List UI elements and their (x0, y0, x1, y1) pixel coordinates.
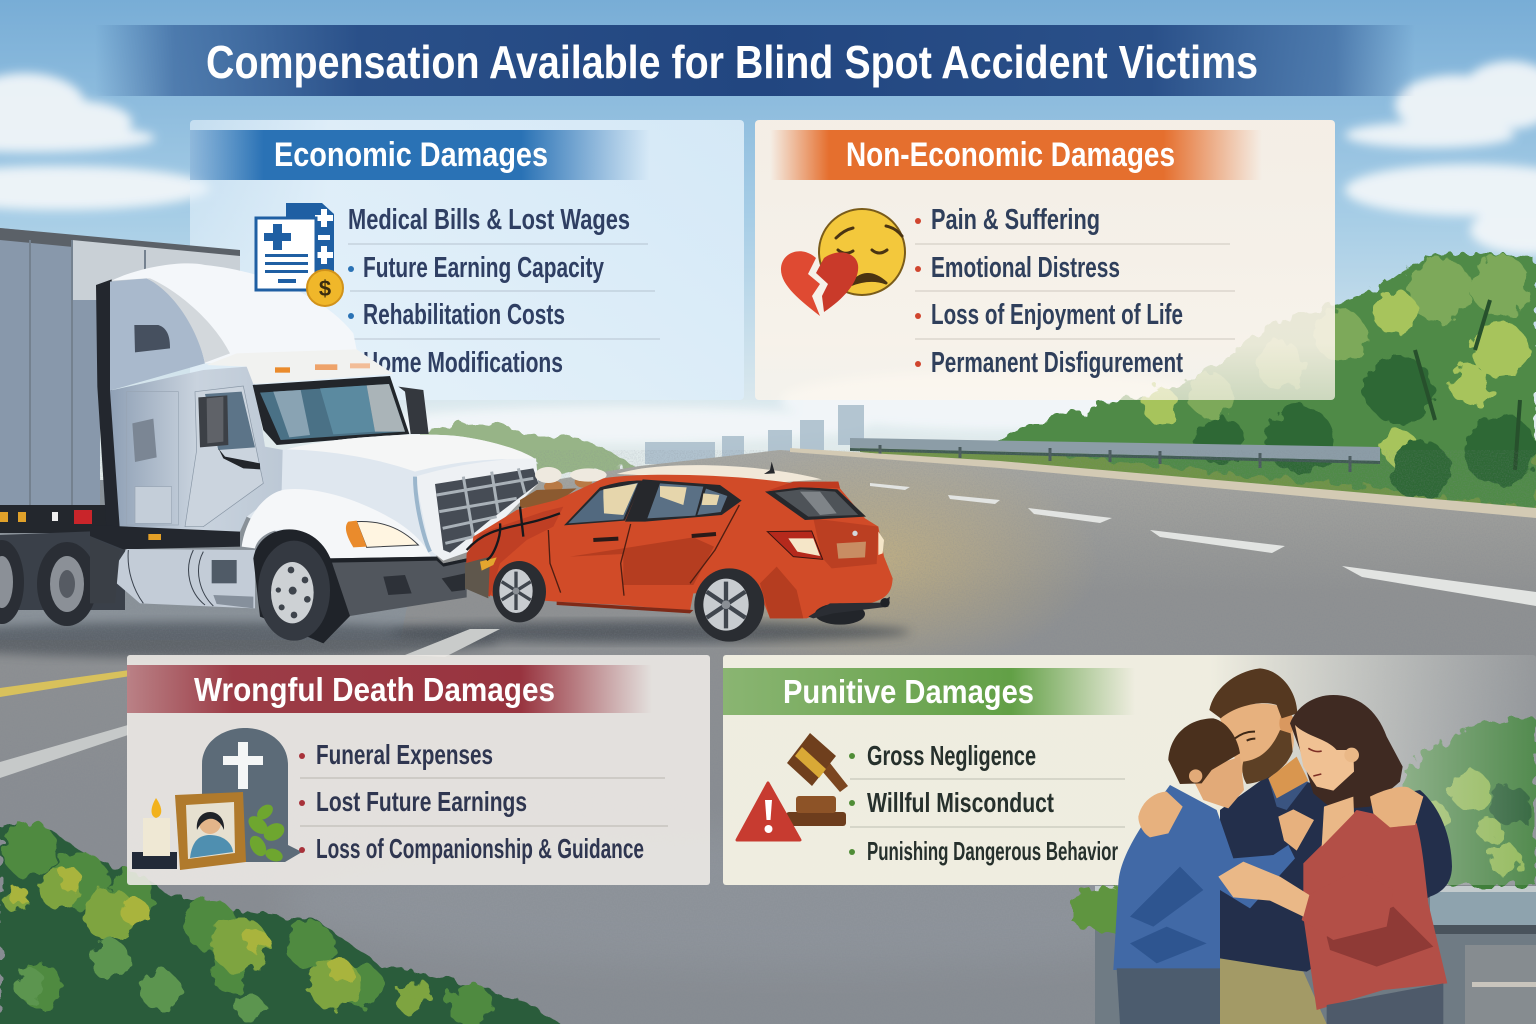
grille (415, 458, 538, 561)
icon: sad face and broken heart (781, 209, 905, 316)
heading: non-economic damages (770, 130, 1262, 180)
hood and front (242, 435, 538, 558)
panel: punitive damages (723, 655, 1536, 885)
illustration: family embracing (1113, 668, 1452, 1024)
background: road surface (0, 445, 1536, 1024)
woman (1218, 695, 1447, 1024)
illustration: red car traced in zoom coordinates (465, 462, 893, 642)
truck trailer (0, 228, 240, 533)
cab upper side (110, 278, 205, 391)
icon: medical bills: $ (319, 276, 331, 301)
heading: punitive damages: Punitive Damages (783, 673, 1034, 710)
bumper (330, 557, 467, 616)
heading: non-economic damages: Non-Economic Damages (846, 136, 1175, 174)
heading: economic damages (190, 130, 650, 180)
list: wrongful death damages: Funeral Expenses (316, 739, 493, 770)
car shading (557, 518, 878, 618)
heading: wrongful death damages: Wrongful Death Damages (194, 671, 555, 708)
cab side details (127, 386, 263, 527)
icon: medical bills (256, 203, 343, 306)
background: shrubs bottom left (0, 822, 570, 1024)
list: punitive damages: Willful Misconduct (867, 787, 1054, 818)
headlight (346, 521, 418, 547)
illustration: semi truck (0, 228, 538, 643)
list: non-economic damages (915, 204, 1235, 379)
car roof (617, 465, 822, 483)
car rear side windows (625, 479, 742, 522)
man (1209, 668, 1452, 1024)
background: distant city skyline (645, 405, 864, 464)
car wheels (493, 561, 764, 642)
visor (207, 349, 393, 384)
background: distant trees (420, 422, 640, 475)
list: wrongful death damages: Lost Future Earnings (316, 786, 527, 817)
front wheel (253, 529, 350, 643)
list: non-economic damages: Loss of Enjoyment of Life (931, 299, 1183, 331)
car bumper exhaust (808, 597, 890, 625)
list: punitive damages: Gross Negligence (867, 740, 1036, 771)
list: non-economic damages: Emotional Distress (931, 252, 1120, 284)
chassis and fuel tank (90, 525, 255, 608)
background: concrete barrier bottom right (1095, 886, 1536, 1024)
car front window (564, 481, 643, 525)
background: trees on the right (1000, 254, 1536, 510)
panel: non-economic damages (755, 120, 1335, 400)
background: clouds (0, 61, 1536, 443)
car rear window and spoiler (765, 482, 866, 520)
list: wrongful death damages: Loss of Companionship & Guidance (316, 833, 644, 864)
title banner: Compensation Available for Blind Spot Accident Victims (206, 36, 1258, 88)
car damaged front (465, 507, 563, 598)
cab window (134, 325, 170, 352)
list: punitive damages (849, 740, 1125, 866)
list: wrongful death damages (299, 739, 668, 864)
icon: gravestone with candle and photo (132, 728, 302, 870)
icon: gavel and warning triangle (737, 733, 848, 840)
heading: economic damages: Economic Damages (274, 136, 548, 174)
cab pillar (96, 279, 121, 532)
antenna (764, 462, 775, 474)
heading: punitive damages (723, 668, 1135, 715)
boy (1113, 718, 1314, 1024)
list: economic damages: Future Earning Capacity (363, 252, 604, 284)
windshield (253, 376, 409, 445)
background: guardrail (850, 438, 1380, 472)
list: economic damages: Home Modifications (363, 347, 563, 379)
heading: wrongful death damages (127, 665, 652, 713)
list: economic damages: Medical Bills & Lost Wages (348, 204, 630, 236)
title banner (95, 25, 1415, 96)
list: punitive damages: Punishing Dangerous Behavior (867, 836, 1118, 866)
background: shrub bottom right (1075, 715, 1536, 935)
truck rear wheels (0, 530, 125, 626)
truck cab traced in zoom coordinates (90, 263, 538, 643)
car body (467, 475, 893, 618)
panel: economic damages (190, 120, 744, 400)
car taillights and plate (767, 531, 884, 559)
car crash debris (520, 467, 607, 508)
list: economic damages (348, 204, 660, 379)
fairing (112, 263, 357, 363)
list: non-economic damages: Pain & Suffering (931, 204, 1100, 236)
car door lines and handles (548, 505, 739, 596)
list: economic damages: Rehabilitation Costs (363, 299, 565, 331)
list: non-economic damages: Permanent Disfigurement (931, 347, 1183, 379)
background: roadside grass (860, 445, 1536, 520)
right mirror (398, 387, 429, 434)
panel: wrongful death damages (127, 655, 710, 885)
background: sky (0, 0, 1536, 480)
cab lower side (110, 367, 283, 532)
